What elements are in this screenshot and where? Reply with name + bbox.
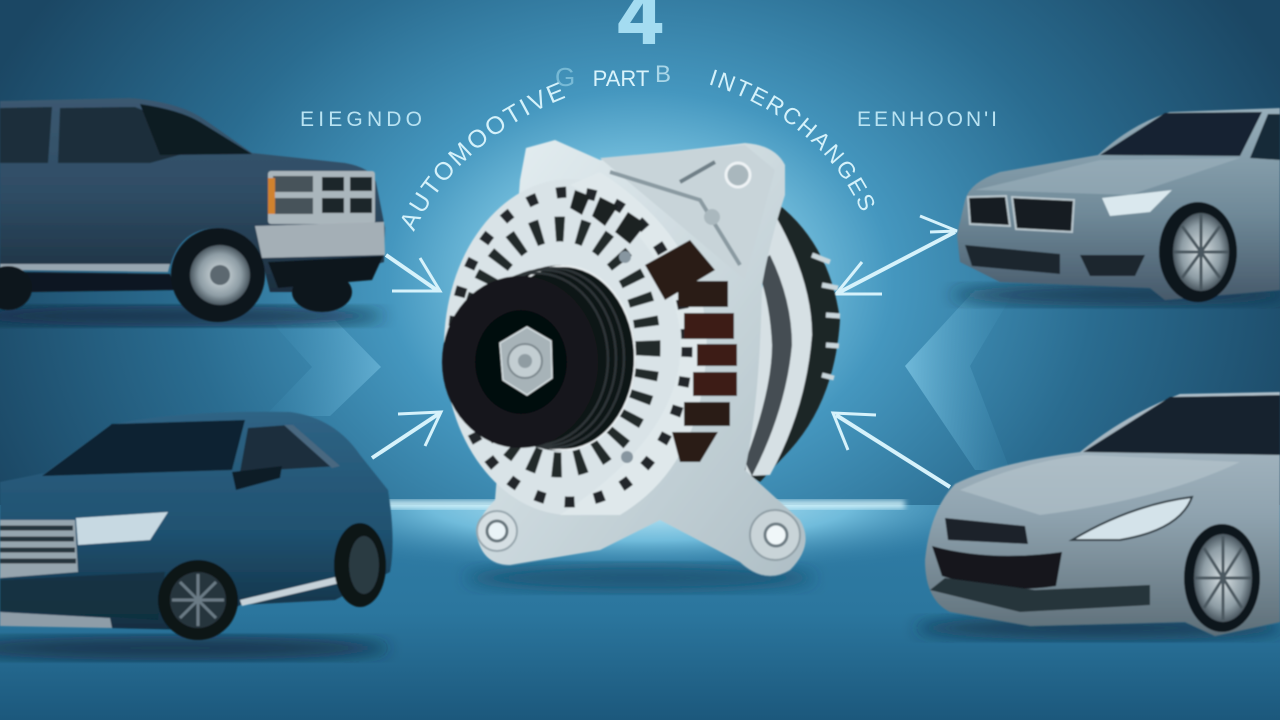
suv windows: [42, 420, 245, 476]
vehicle: silver coupe bottom right: [915, 392, 1280, 640]
vehicle: grey sedan top right: [950, 108, 1280, 306]
stator windows: [645, 240, 737, 462]
outer fan slots: [453, 192, 687, 502]
suv headlight: [76, 512, 168, 545]
suv grille: [0, 520, 78, 578]
coupe wheel: [1184, 524, 1260, 632]
pulley body: [484, 265, 636, 451]
mounting bracket: [476, 140, 806, 576]
arrow: truck to alternator: [386, 255, 440, 291]
coupe grille: [932, 546, 1062, 589]
mount bolt right: [750, 510, 800, 560]
sedan headlight: [1102, 190, 1172, 216]
heading arc: interchanges: INTERCHANGES: [710, 70, 874, 210]
coupe windows: [1083, 395, 1280, 455]
arrow: suv to alternator: [372, 412, 441, 458]
coupe hood: [960, 455, 1240, 515]
sedan hood highlight: [975, 158, 1240, 195]
heading fragment: part: G: [555, 62, 575, 92]
sedan windows: [1100, 112, 1262, 156]
heading fragment: part: B: [655, 61, 671, 88]
side label right: EENHOON'I: [857, 108, 997, 131]
truck bumper: [255, 222, 385, 258]
arrow: coupe to alternator: [833, 413, 950, 487]
chevron right: [905, 290, 1015, 470]
heading fragment: part: [555, 61, 671, 92]
truck wheels: [171, 228, 265, 322]
dust slots upper: [570, 190, 646, 244]
inner fan slots: [472, 229, 648, 465]
hex nut: [500, 327, 552, 395]
mount bolt left: [477, 511, 517, 551]
coupe headlight: [1072, 497, 1192, 540]
arrow: sedan to alternator: [836, 216, 957, 294]
pulley face: [442, 276, 598, 448]
vehicle: blue suv: [0, 412, 393, 660]
rear black housing: [740, 204, 840, 482]
main bell housing: [444, 179, 696, 515]
suv wheels: [158, 560, 238, 640]
truck windows: [0, 107, 190, 163]
heading arc: automotive: AUTOMOOTIVE: [402, 82, 566, 232]
truck grille: [268, 171, 375, 224]
chevron left: [265, 320, 381, 416]
upper ribs: [600, 145, 775, 280]
vehicle: pickup truck: [0, 98, 385, 326]
sedan grille: [968, 196, 1010, 226]
rear fins: [812, 255, 840, 378]
sedan wheel: [1159, 202, 1237, 302]
heading fragment: part: PART: [593, 66, 649, 91]
alternator: [442, 140, 840, 592]
side label left: EIEGNDO: [300, 108, 422, 131]
